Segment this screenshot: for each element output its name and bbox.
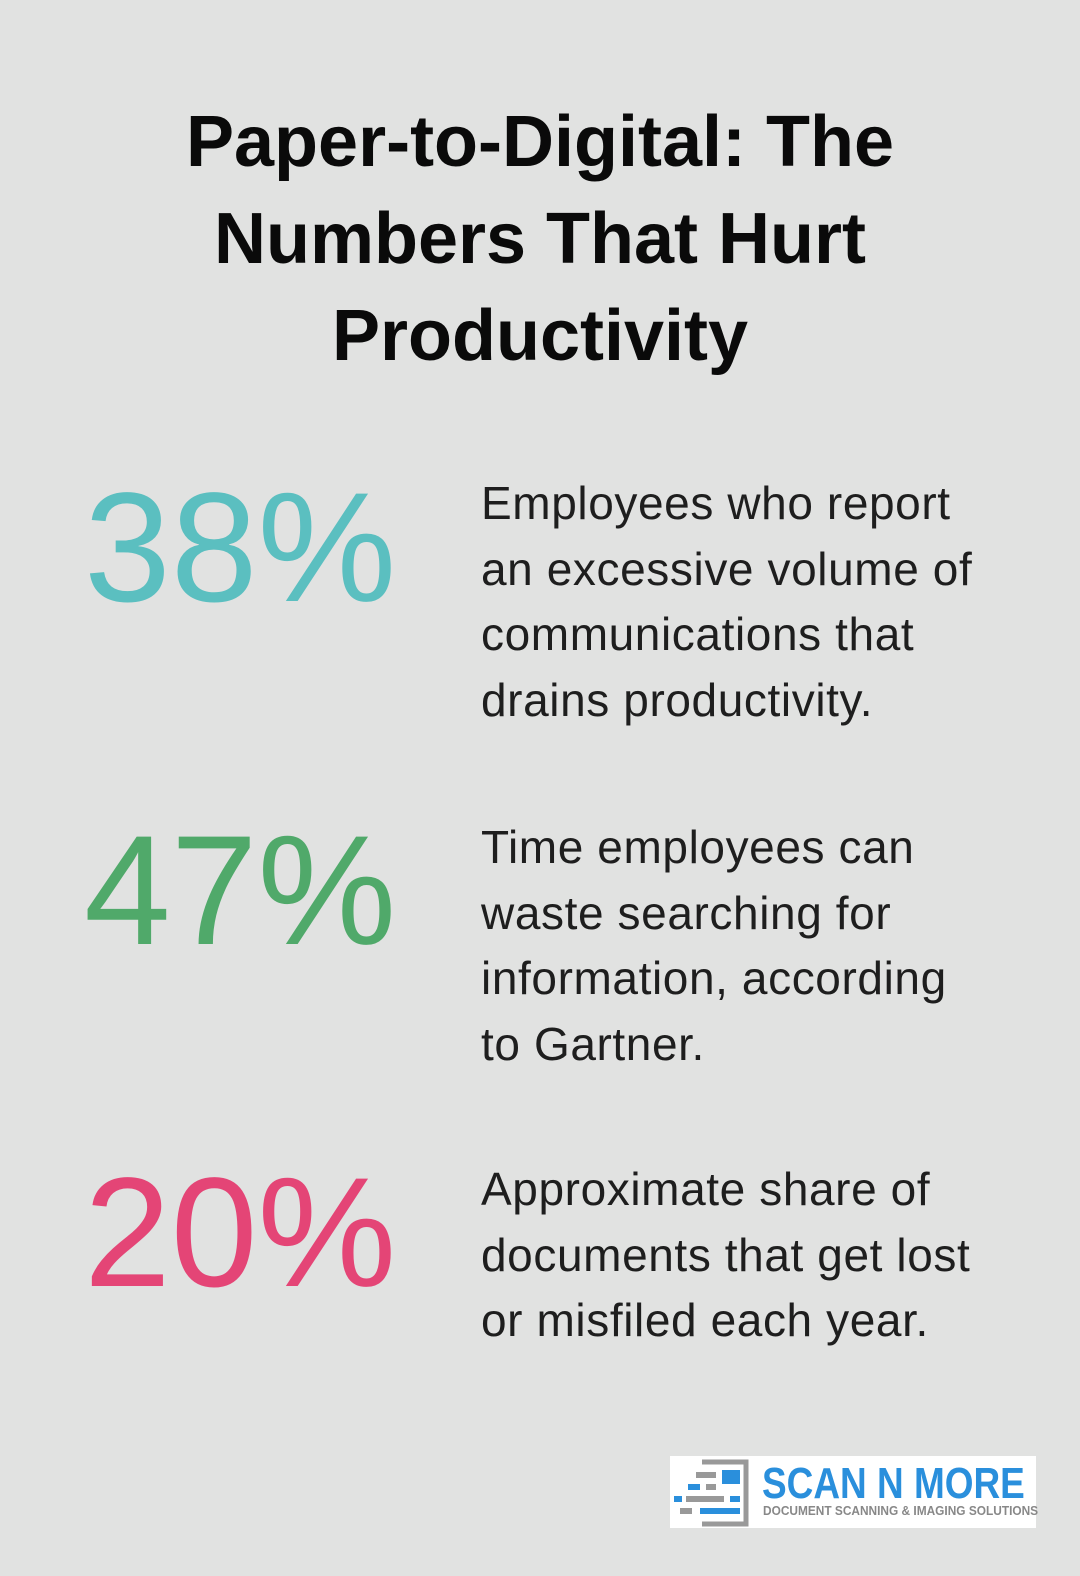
number 38%: 38% [84, 461, 396, 635]
text 2: information, according [481, 952, 947, 1004]
number 20%: 20% [84, 1146, 396, 1320]
stat row 1 [84, 461, 972, 726]
text 2: waste searching for [481, 886, 891, 938]
icon: scanner [674, 1460, 748, 1526]
title: Numbers That Hurt [214, 199, 866, 279]
title: Paper-to-Digital: The [186, 102, 894, 182]
text 3: or misfiled each year. [481, 1294, 929, 1346]
text 1: an excessive volume of [481, 542, 972, 594]
text 2 [481, 821, 947, 1070]
stat row 2 [84, 804, 947, 1070]
text 1: Employees who report [481, 477, 951, 529]
stat row 3 [84, 1146, 970, 1346]
title: Productivity [332, 296, 748, 376]
number 47%: 47% [84, 804, 396, 978]
text 1: drains productivity. [481, 674, 873, 726]
text 1: communications that [481, 608, 914, 660]
text 3: documents that get lost [481, 1228, 970, 1280]
text 3 [481, 1163, 970, 1346]
logo [670, 1456, 1036, 1528]
logo: DOCUMENT SCANNING & IMAGING SOLUTIONS [763, 1504, 1038, 1518]
text 2: to Gartner. [481, 1018, 705, 1070]
text 2: Time employees can [481, 821, 914, 873]
text 3: Approximate share of [481, 1163, 930, 1215]
text 1 [481, 477, 972, 726]
title [186, 102, 894, 376]
logo text: SCAN N MORE [762, 1459, 1025, 1508]
